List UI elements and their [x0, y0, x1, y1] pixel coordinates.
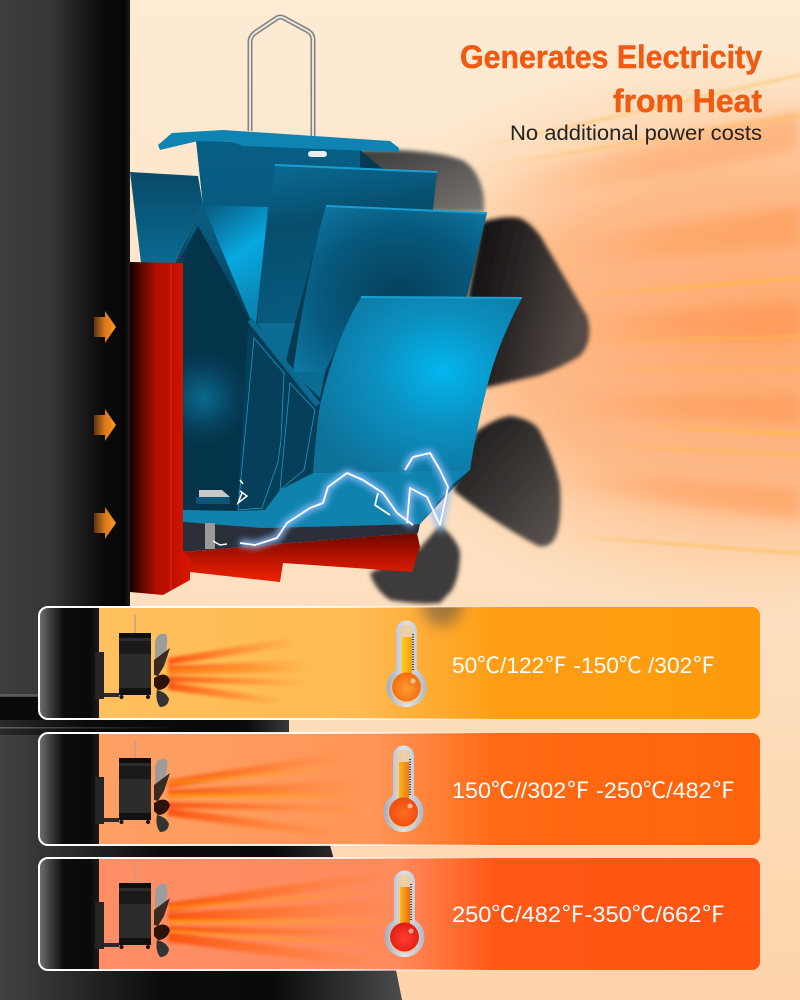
heat arrow 3	[94, 507, 116, 539]
stove base	[0, 858, 402, 1000]
heat arrow 2	[94, 409, 116, 441]
hollow interior	[183, 226, 262, 523]
base plate	[183, 470, 470, 528]
middle blade	[293, 206, 487, 372]
blade top edges	[275, 165, 522, 298]
rear blade	[257, 165, 437, 323]
central column and Y support	[176, 140, 360, 323]
thermometer	[387, 620, 427, 707]
hanging wire hook	[250, 17, 313, 137]
rib outlines	[238, 338, 315, 510]
heading line 1: Generates Electricity	[460, 39, 762, 75]
thermometer	[385, 870, 425, 957]
middle blade lower lip	[293, 372, 325, 398]
shadow gap under plate	[183, 522, 420, 552]
rear fan blades	[355, 150, 589, 604]
red heat-collecting bracket	[130, 262, 420, 595]
heat glow	[310, 50, 800, 620]
blade right	[468, 217, 589, 388]
electric arc	[213, 453, 448, 545]
diagonal brace	[250, 320, 318, 405]
lower web ribs	[237, 327, 317, 513]
panel: medium temperature range	[38, 733, 760, 845]
heading line 2: from Heat	[613, 83, 762, 119]
rear blade lower lip	[257, 323, 295, 365]
stove pipe lower left strip	[0, 606, 100, 696]
stove pipe	[0, 0, 130, 606]
fan icon	[95, 615, 170, 707]
heat arrow 1	[94, 311, 116, 343]
fan body	[130, 130, 522, 552]
dark backing	[175, 140, 470, 528]
heading	[460, 39, 762, 145]
front blade	[313, 297, 522, 473]
blade bottom	[370, 525, 460, 604]
temperature range: 150℃//302℉ -250℃/482℉	[452, 778, 735, 803]
fine yellow heat lines	[460, 73, 800, 555]
panel: high temperature range	[38, 858, 760, 970]
left wedge fin	[130, 172, 203, 263]
fan icon	[95, 865, 170, 957]
wire clip	[308, 151, 327, 157]
temperature range: 250℃/482℉-350℃/662℉	[452, 902, 725, 927]
top plate	[158, 130, 399, 152]
temperature range: 50℃/122℉ -150℃ /302℉	[452, 653, 715, 678]
blade lower right	[453, 416, 560, 546]
heat streaks	[500, 110, 800, 520]
screw	[196, 490, 230, 549]
stove flange tier 1	[0, 694, 289, 735]
subheading: No additional power costs	[510, 122, 762, 145]
blade top	[355, 150, 484, 212]
stove flange tier 2	[0, 735, 334, 860]
thermometer	[384, 746, 424, 832]
panel: low temperature range	[38, 606, 760, 720]
fan icon	[95, 740, 170, 832]
Y arm highlight	[203, 205, 268, 323]
